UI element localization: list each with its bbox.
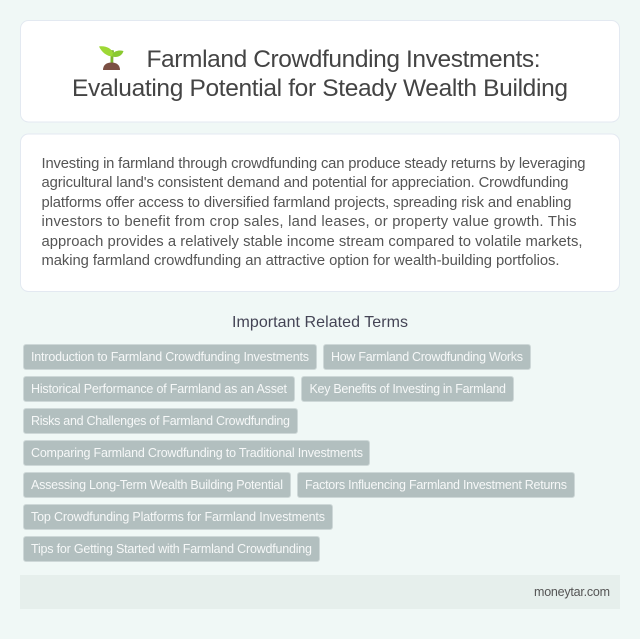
title: Evaluating Potential for Steady Wealth Building: [72, 75, 568, 102]
panel: header: [20, 20, 620, 122]
tag: top platforms: [24, 504, 332, 530]
tag: comparing: Comparing Farmland Crowdfunding to Traditional Investments: [31, 446, 363, 460]
panel: summary: [20, 134, 620, 292]
tag: risks: [24, 408, 298, 434]
tag list: [24, 344, 574, 562]
tag: key benefits: [302, 376, 514, 402]
summary text: making farmland crowdfunding an attractive option for wealth-building portfolios.: [42, 253, 560, 269]
footer: [20, 575, 620, 609]
tag: comparing: [24, 440, 370, 466]
tag: risks: Risks and Challenges of Farmland Crowdfunding: [31, 414, 290, 428]
tag: top platforms: Top Crowdfunding Platforms for Farmland Investments: [31, 510, 325, 524]
footer source text: moneytar.com: [534, 585, 610, 599]
title: Farmland Crowdfunding Investments:: [146, 46, 540, 73]
summary text: [42, 156, 586, 269]
summary text: investors to benefit from crop sales, land leases, or property value growth. This: [42, 214, 576, 230]
tag: factors: [298, 472, 574, 498]
summary text: approach provides a relatively stable income stream compared to volatile markets,: [42, 234, 582, 250]
tag: how it works: [324, 344, 530, 370]
tag: long-term potential: [24, 472, 290, 498]
tag: introduction: Introduction to Farmland Crowdfunding Investments: [31, 350, 309, 364]
summary text: platforms offer access to diversified farmland projects, spreading risk and enabling: [42, 195, 572, 211]
summary text: agricultural land's consistent demand and potential for appreciation. Crowdfunding: [42, 175, 568, 191]
tag: how it works: How Farmland Crowdfunding Works: [331, 350, 523, 364]
tag: introduction: [24, 344, 316, 370]
tag: getting started: Tips for Getting Started with Farmland Crowdfunding: [31, 542, 312, 556]
tag: getting started: [24, 536, 320, 562]
summary text: Investing in farmland through crowdfunding can produce steady returns by leveraging: [42, 156, 586, 172]
icon: sprout: [99, 46, 124, 70]
title: [72, 46, 568, 102]
tag: historical performance: [24, 376, 294, 402]
tag: key benefits: Key Benefits of Investing in Farmland: [310, 382, 506, 396]
heading: important related terms: Important Related Terms: [232, 314, 408, 331]
tag: factors: Factors Influencing Farmland Investment Returns: [305, 478, 567, 492]
tag: historical performance: Historical Performance of Farmland as an Asset: [31, 382, 288, 396]
tag: long-term potential: Assessing Long-Term Wealth Building Potential: [31, 478, 283, 492]
